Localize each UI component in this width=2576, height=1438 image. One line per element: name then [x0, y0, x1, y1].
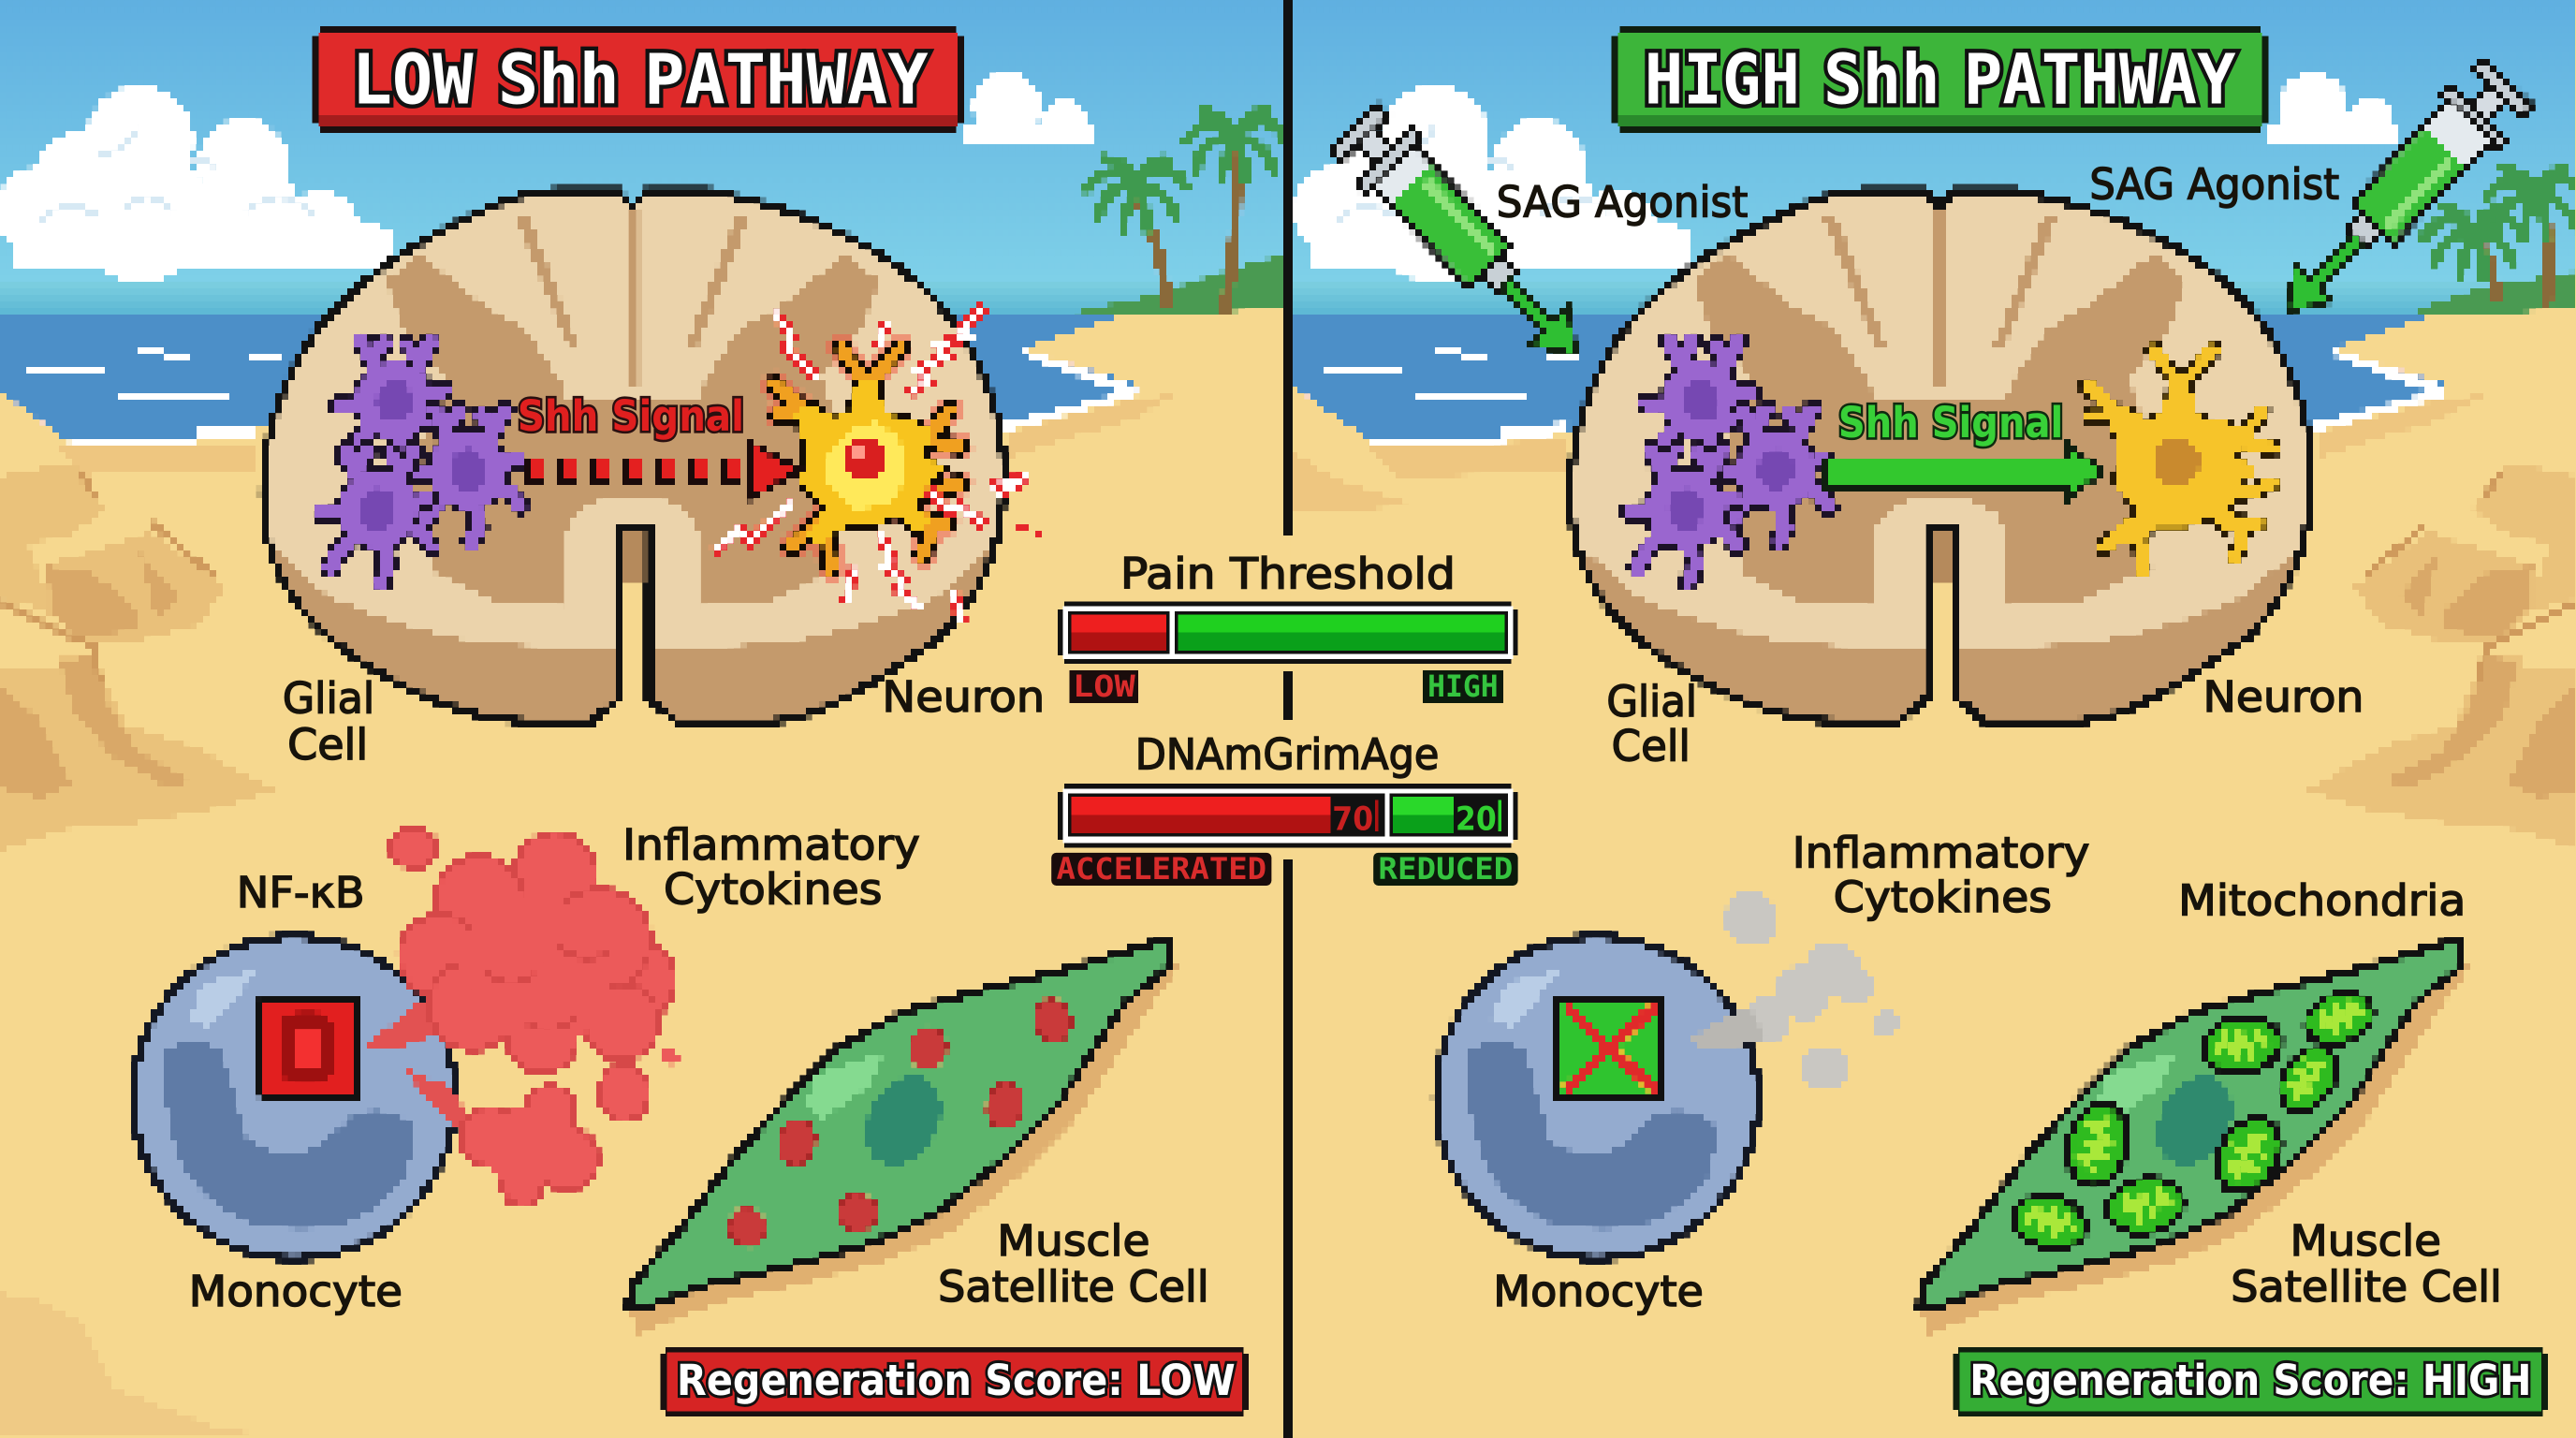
bar: pain threshold — [1058, 601, 1518, 664]
label: glial cell (high): Glial — [1606, 677, 1697, 726]
bar: DNAmGrimAge: 70 — [1332, 800, 1373, 838]
label: Shh Signal (high): Shh Signal — [1838, 398, 2063, 448]
label: muscle satellite cell (high) — [2231, 1216, 2502, 1312]
panel: high Shh pathway — [1325, 26, 2548, 1416]
regeneration score: LOW: Regeneration Score: LOW — [677, 1356, 1236, 1405]
label: inflammatory cytokines (high) — [1793, 829, 2089, 922]
muscle satellite cell with damaged mitochondria — [627, 938, 1183, 1334]
title: LOW Shh PATHWAY — [312, 26, 964, 133]
label: inflammatory cytokines (high): Cytokines — [1834, 873, 2052, 922]
label: glial cell (high): Cell — [1612, 722, 1690, 771]
bar: DNAmGrimAge: 20 — [1456, 800, 1497, 838]
monocyte with active NF-kB — [133, 936, 455, 1258]
bar: DNAmGrimAge — [1058, 784, 1518, 848]
monocyte with blocked NF-kB — [1436, 936, 1758, 1258]
label: glial cell (high) — [1606, 677, 1697, 771]
label: NF-kB: NF-κB — [237, 868, 365, 917]
tag: REDUCED: REDUCED — [1378, 853, 1513, 887]
arrow: dashed Shh signal (low) — [527, 442, 801, 500]
icon: healthy neuron — [2088, 350, 2272, 570]
label: neuron (high): Neuron — [2203, 672, 2364, 722]
heading: Pain Threshold: Pain Threshold — [1120, 549, 1456, 598]
label: SAG agonist left: SAG Agonist — [1497, 178, 1748, 227]
title: LOW Shh PATHWAY: LOW Shh PATHWAY — [352, 41, 929, 121]
tag: LOW: LOW — [1073, 670, 1136, 704]
icon: syringe right — [2259, 54, 2537, 339]
label: neuron (low): Neuron — [882, 672, 1045, 722]
muscle satellite cell with healthy mitochondria — [1919, 938, 2474, 1334]
label: inflammatory cytokines (low): Inflammatory — [622, 820, 920, 870]
label: mitochondria: Mitochondria — [2178, 876, 2466, 926]
tag: ACCELERATED: ACCELERATED — [1056, 853, 1266, 887]
label: muscle satellite cell (low): Satellite Cell — [938, 1262, 1209, 1312]
icon: blocked NF-kB box — [1558, 997, 1662, 1099]
center divider line — [1283, 0, 1293, 1438]
label: muscle satellite cell (high): Muscle — [2290, 1216, 2441, 1266]
label: glial cell (low): Cell — [287, 720, 368, 770]
label: inflammatory cytokines (high): Inflammatory — [1793, 829, 2089, 878]
label: muscle satellite cell (high): Satellite Cell — [2231, 1262, 2502, 1312]
label: inflammatory cytokines (low): Cytokines — [664, 864, 882, 914]
regeneration score: HIGH — [1954, 1347, 2548, 1416]
label: inflammatory cytokines (low) — [622, 820, 920, 914]
icon: syringe left — [1325, 99, 1604, 382]
icon: damaged neuron with pain lightning — [714, 305, 1043, 621]
panel: low Shh pathway — [133, 26, 1249, 1416]
arrow: solid Shh signal (high) — [1825, 442, 2102, 501]
label: glial cell (low) — [283, 674, 374, 770]
spinal cord cross-section (low) with cells — [246, 191, 1043, 731]
regeneration score: LOW — [661, 1347, 1249, 1416]
label: muscle satellite cell (low): Muscle — [997, 1216, 1149, 1266]
cytokine wisps (grey) — [1684, 890, 1899, 1090]
heading: DNAmGrimAge: DNAmGrimAge — [1135, 729, 1439, 779]
spinal cord cross-section (high) with cells — [1554, 191, 2326, 731]
cytokine cloud (red) — [361, 829, 679, 1206]
title: HIGH Shh PATHWAY: HIGH Shh PATHWAY — [1645, 41, 2236, 121]
panel: center comparison meters — [1051, 549, 1518, 887]
icon: NF-kB red box — [259, 999, 359, 1097]
label: glial cell (low): Glial — [283, 674, 374, 724]
label: monocyte (low): Monocyte — [189, 1267, 402, 1316]
label: SAG agonist right: SAG Agonist — [2089, 159, 2339, 209]
label: monocyte (high): Monocyte — [1493, 1267, 1704, 1316]
tag: HIGH: HIGH — [1427, 670, 1499, 704]
label: Shh Signal (low): Shh Signal — [518, 391, 744, 441]
label: muscle satellite cell (low) — [938, 1216, 1209, 1312]
